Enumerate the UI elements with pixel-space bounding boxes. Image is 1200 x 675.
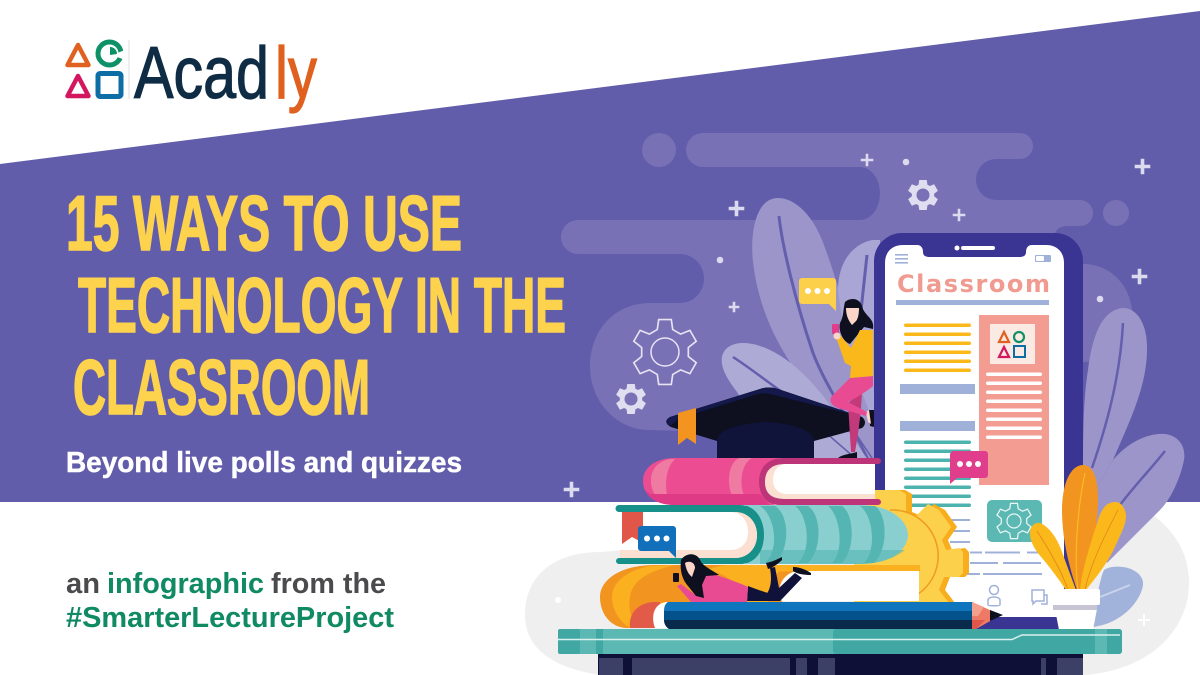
large leaf vein bbox=[779, 216, 868, 460]
dashed content lines bbox=[945, 519, 1045, 575]
pencil blue top bbox=[664, 602, 973, 611]
title line 1: 15 WAYS TO USE bbox=[66, 179, 462, 267]
teal spine stripes bbox=[760, 506, 905, 564]
teal spine bbox=[745, 505, 908, 564]
lower stem lines bbox=[825, 425, 872, 458]
teal book covers bbox=[616, 505, 764, 564]
tagline: infographic: infographic bbox=[107, 568, 264, 600]
large leaf bbox=[752, 198, 880, 460]
salmon side panel bbox=[979, 315, 1049, 485]
lower right leaf bbox=[1085, 434, 1184, 563]
pink book pages bbox=[765, 464, 875, 499]
yellow sweater bbox=[836, 330, 873, 378]
orange leaf bbox=[1062, 465, 1098, 590]
tagline: hashtag: #SmarterLectureProject bbox=[66, 602, 394, 634]
tagline: an: an bbox=[66, 568, 100, 600]
shoe standing bbox=[838, 452, 857, 458]
right yellow leaf bbox=[1080, 502, 1126, 590]
gear shadow bbox=[860, 490, 969, 620]
large yellow gear bbox=[854, 490, 969, 620]
pencil mid band bbox=[664, 611, 973, 620]
pink covers bbox=[759, 458, 881, 505]
decorative leaves behind phone bbox=[722, 198, 880, 460]
phone heading: Classroom bbox=[897, 270, 1050, 298]
pants bbox=[830, 376, 873, 416]
orange plant in pot bbox=[1030, 465, 1126, 630]
hair bbox=[681, 554, 719, 598]
white page curl bbox=[653, 602, 668, 628]
pot bbox=[1055, 609, 1097, 630]
hand bbox=[834, 332, 840, 340]
cloud dot right bbox=[1103, 200, 1129, 226]
logo bbox=[68, 33, 317, 114]
dots bbox=[903, 159, 909, 165]
smartphone bbox=[874, 233, 1083, 633]
phone in hand bbox=[832, 324, 839, 334]
table highlight line bbox=[558, 635, 1120, 640]
title bbox=[66, 179, 566, 431]
logo icon: orange triangle bbox=[68, 45, 88, 65]
gear face bbox=[854, 490, 963, 620]
tagline: from the: from the bbox=[271, 568, 386, 600]
orange cover bbox=[600, 565, 920, 628]
logo icon: blue square bbox=[98, 74, 121, 96]
logo icon: pink triangle bbox=[68, 76, 88, 96]
heading underline bbox=[896, 300, 1049, 305]
logo divider bbox=[128, 40, 130, 99]
main cloud bbox=[561, 133, 1133, 432]
orange leaf vein bbox=[1076, 473, 1085, 590]
pencil bbox=[664, 602, 1003, 629]
orange book pages bbox=[779, 571, 919, 601]
hair bbox=[840, 299, 873, 344]
grey ground blob bbox=[525, 502, 1189, 675]
table top bbox=[558, 629, 1122, 654]
woman lying on book bbox=[673, 554, 811, 602]
logo icon: green circle bbox=[98, 42, 125, 65]
mortarboard bbox=[666, 388, 865, 441]
pink arm bbox=[677, 582, 708, 602]
title line 3: CLASSROOM bbox=[73, 343, 370, 431]
orange spine stripes bbox=[612, 565, 675, 628]
table legs bbox=[598, 654, 1083, 675]
upper leaf behind phone bbox=[838, 240, 880, 440]
pot rim bbox=[1052, 589, 1100, 605]
upper leaf vein bbox=[860, 255, 867, 320]
gear icon small top bbox=[910, 181, 936, 209]
lower leaf vein bbox=[733, 357, 782, 392]
phone body bbox=[874, 233, 1083, 633]
logo wordmark Acad: Acad bbox=[134, 33, 269, 114]
tall right leaf bbox=[1083, 308, 1147, 490]
cap base bbox=[717, 419, 814, 458]
pot shadow band bbox=[1053, 605, 1097, 610]
red bookmark bbox=[622, 512, 643, 544]
table darker segments bbox=[558, 629, 1122, 654]
right leaf vein bbox=[1085, 510, 1118, 590]
tagline bbox=[66, 568, 394, 634]
pencil dark band bbox=[664, 620, 973, 629]
raised shoe bbox=[869, 410, 874, 427]
shoes bbox=[766, 557, 782, 569]
toggle icon bbox=[1035, 255, 1051, 262]
phone bbox=[673, 573, 679, 582]
teal text lines bbox=[904, 440, 971, 507]
background cloud shapes bbox=[561, 133, 1133, 432]
gear arc bbox=[890, 510, 938, 594]
graduation cap bbox=[666, 388, 865, 458]
cap top edge bbox=[666, 388, 862, 426]
pink spine bbox=[643, 458, 780, 505]
pink torso bbox=[702, 573, 748, 602]
woman standing with phone bbox=[830, 299, 874, 458]
face bbox=[685, 562, 695, 577]
lower right leaf vein bbox=[1120, 451, 1165, 505]
face bbox=[846, 308, 859, 325]
yellow chat bubble bbox=[799, 278, 836, 311]
blue chat bubble bbox=[638, 526, 676, 558]
top cover strip bbox=[760, 565, 920, 572]
table lighter segment bbox=[1095, 629, 1107, 654]
pencil lead bbox=[990, 610, 1003, 621]
side panel logo card bbox=[990, 324, 1035, 364]
logo wordmark ly: ly bbox=[275, 33, 317, 114]
blue bars bbox=[900, 384, 975, 431]
pink spine stripes bbox=[651, 459, 675, 503]
teal settings card bbox=[987, 500, 1042, 542]
sparkles bbox=[564, 154, 1150, 497]
side panel white lines bbox=[986, 372, 1042, 439]
title line 2: TECHNOLOGY IN THE bbox=[78, 261, 566, 349]
plus marks bbox=[729, 201, 744, 216]
chat nav icon bbox=[1032, 590, 1047, 604]
standing leg bbox=[848, 392, 862, 452]
menu icon bbox=[895, 254, 908, 264]
raised legs bbox=[760, 567, 802, 601]
left yellow leaf bbox=[1030, 523, 1076, 590]
left leaf vein bbox=[1037, 531, 1068, 590]
red page curl bbox=[630, 602, 660, 628]
gear icon small left bbox=[618, 385, 644, 413]
leg light panels bbox=[599, 658, 1083, 675]
phone screen bbox=[885, 245, 1064, 620]
pencil tip bbox=[972, 602, 992, 629]
right side leaves bbox=[1083, 308, 1184, 563]
purple slanted background banner bbox=[0, 11, 1200, 502]
teal middle book bbox=[616, 505, 908, 564]
subtitle: Beyond live polls and quizzes bbox=[66, 447, 462, 479]
teal book pages bbox=[620, 512, 757, 558]
legs on ground bbox=[747, 586, 781, 601]
tall right leaf vein bbox=[1092, 323, 1123, 468]
gear icon outline bbox=[634, 320, 696, 384]
cloud dot left bbox=[642, 133, 676, 167]
blue pot leaf bbox=[1093, 567, 1143, 627]
phone speaker bbox=[954, 246, 995, 250]
white sparkle on grey bbox=[555, 597, 1150, 626]
table bbox=[558, 629, 1122, 675]
person nav icon bbox=[988, 586, 1000, 606]
orange ribbon bbox=[678, 408, 696, 445]
orange bottom book bbox=[600, 565, 920, 628]
phone base strip bbox=[980, 617, 1070, 630]
lower leaf bbox=[722, 343, 868, 460]
pink top book bbox=[643, 458, 881, 505]
skin foot bbox=[866, 410, 871, 424]
yellow text lines bbox=[904, 324, 971, 372]
pink chat bubble bbox=[950, 451, 988, 484]
